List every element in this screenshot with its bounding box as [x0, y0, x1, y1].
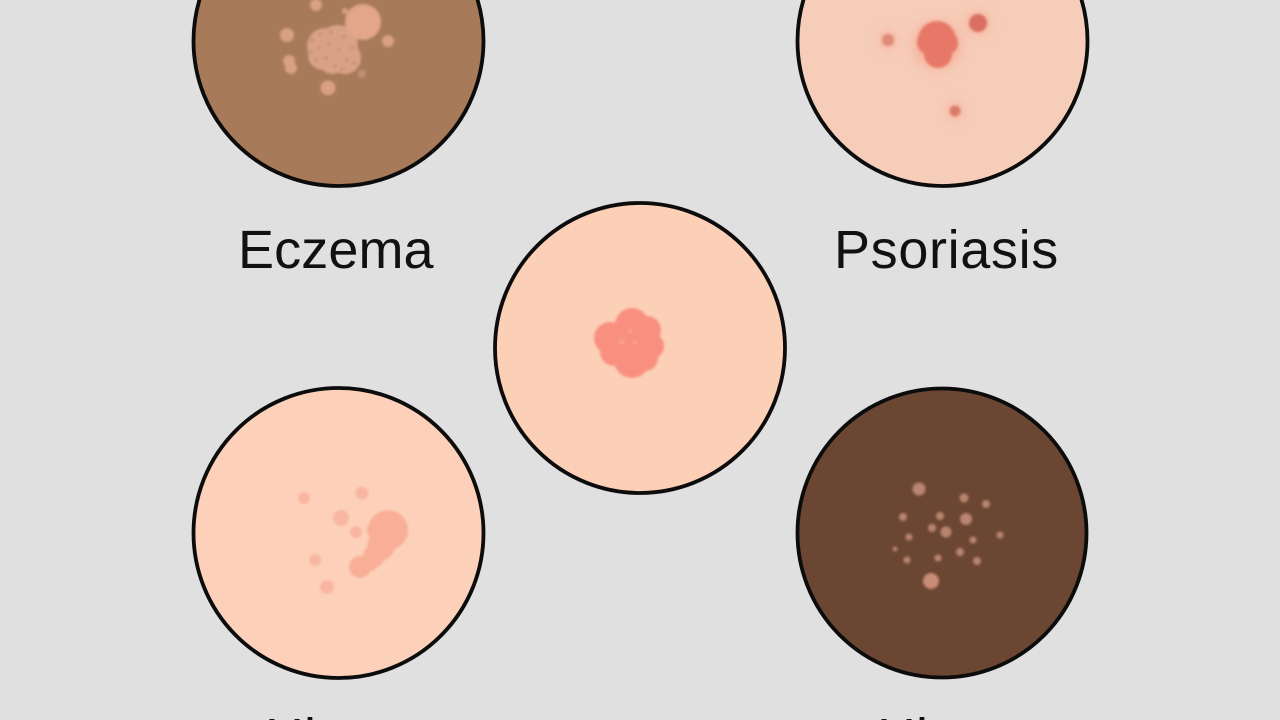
panel: psoriasis on light skin [798, 0, 1088, 186]
panel: lesions on dark skin [798, 388, 1086, 678]
label: Eczema: Eczema [238, 220, 435, 280]
panel: lesions on pale skin [194, 388, 484, 678]
lesion: central plaque [594, 308, 664, 378]
panel: eczema on medium-brown skin [194, 0, 484, 186]
panel: central lesion on light skin [495, 203, 785, 493]
skin circle: eczema [194, 0, 484, 186]
skin circle: center [495, 203, 785, 493]
lesions: pale rash [298, 486, 408, 594]
lesions: eczema patches [280, 0, 394, 96]
label: Psoriasis: Psoriasis [834, 220, 1059, 280]
skin circle: lower left [194, 388, 484, 678]
lesions: scattered papules [892, 482, 1004, 589]
skin circle: psoriasis [798, 0, 1088, 186]
lesions: psoriasis plaques [882, 14, 987, 116]
skin circle: lower right [798, 388, 1086, 678]
halo: psoriasis inflammation [879, 11, 990, 119]
